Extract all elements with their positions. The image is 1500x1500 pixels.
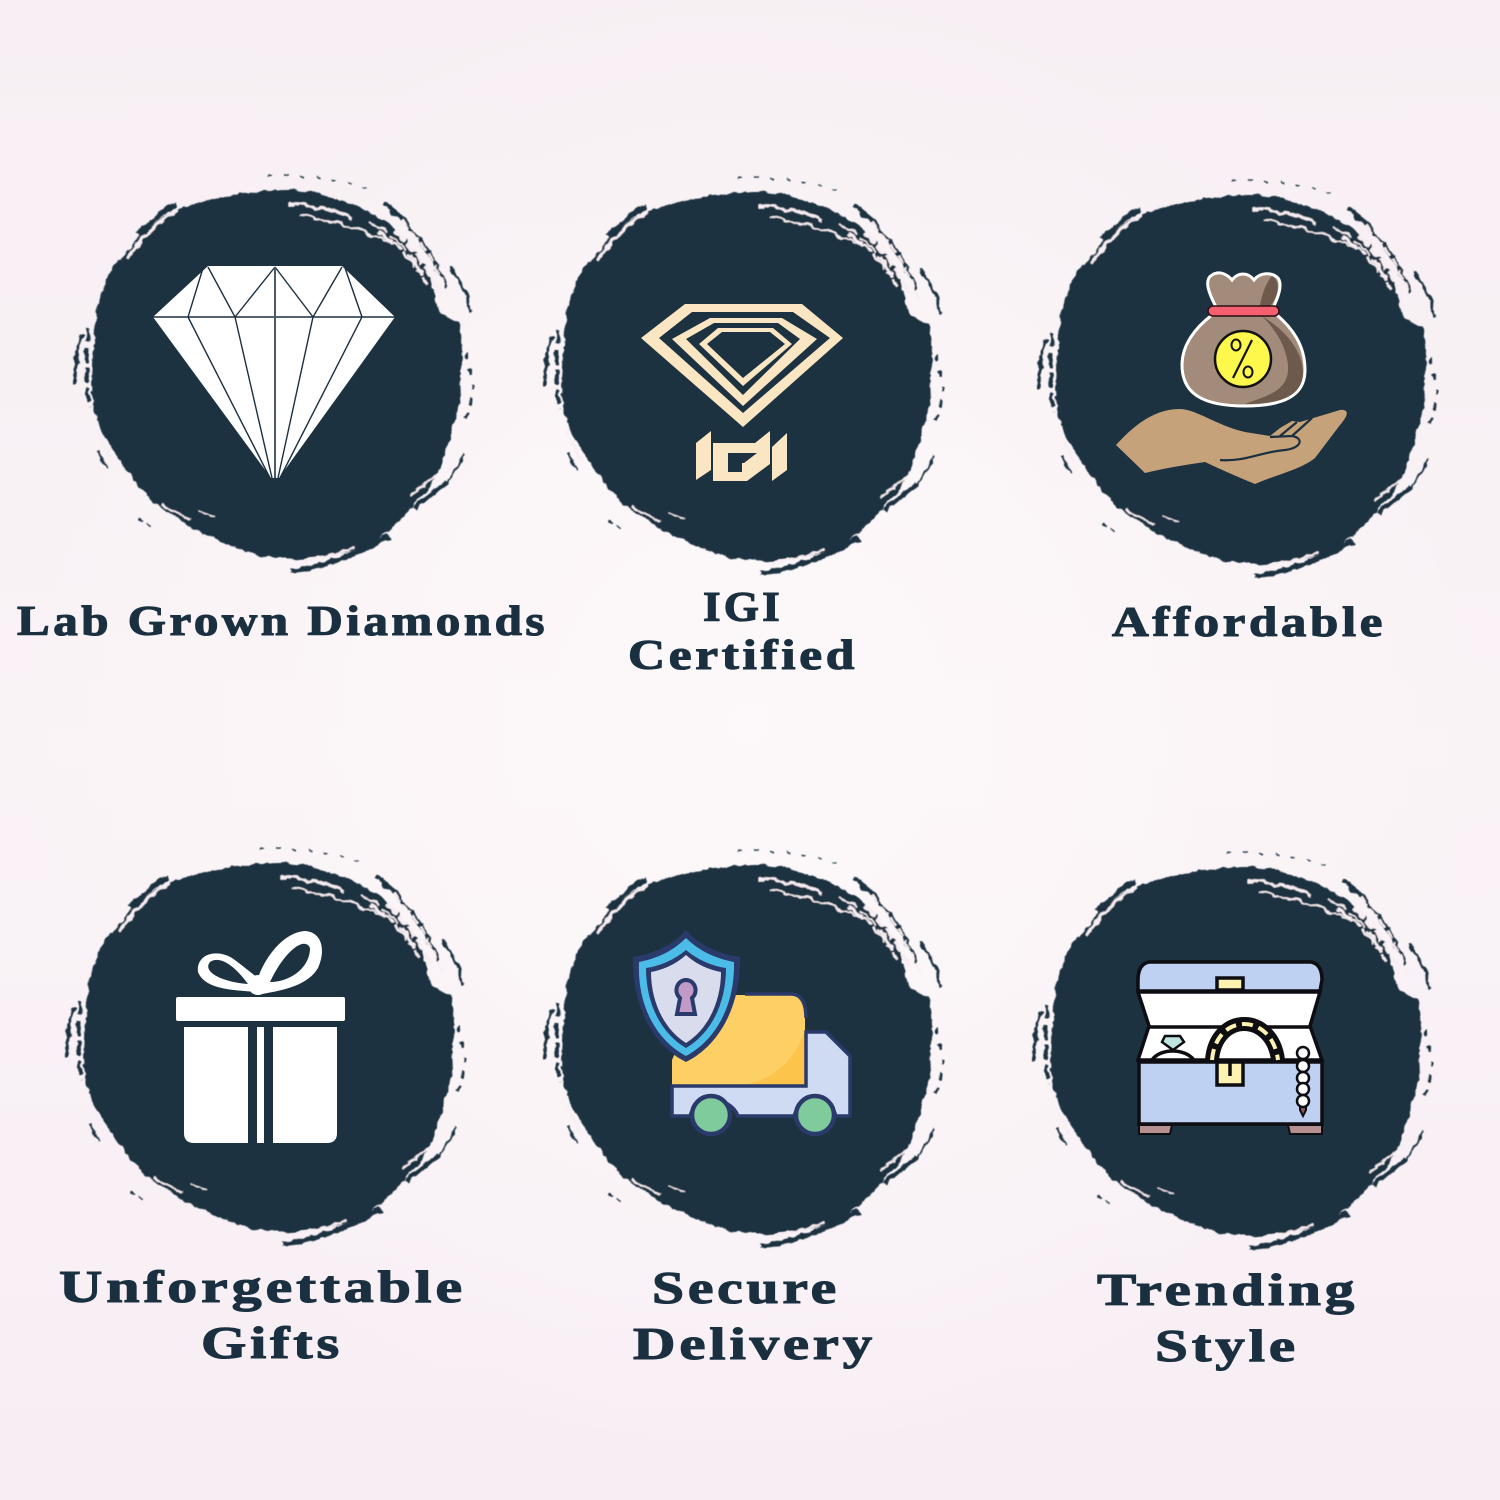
- label: [628, 585, 858, 679]
- icon: jewellery box: [1138, 962, 1322, 1134]
- panel: unforgettable gifts: [59, 848, 466, 1368]
- brush circle 4: [67, 848, 464, 1244]
- panel: secure delivery: [545, 850, 942, 1369]
- icon: delivery truck with shield: [633, 930, 850, 1134]
- label: Certified: [628, 633, 858, 679]
- icon: gift box: [176, 931, 345, 1143]
- label: Style: [1155, 1320, 1299, 1371]
- label: [59, 1261, 466, 1368]
- label: Trending: [1097, 1264, 1358, 1315]
- brush circle 1: [75, 176, 472, 571]
- icon: IGI logo: [641, 304, 843, 481]
- icon: diamond: [153, 266, 395, 478]
- brush circle 5: [545, 850, 942, 1246]
- icon: hand: [1116, 409, 1347, 484]
- panel: IGI certified: [545, 178, 942, 679]
- icon: money bag: [1182, 273, 1305, 406]
- label: [1097, 1264, 1358, 1371]
- brush circle 2: [545, 178, 942, 573]
- label: Affordable: [1112, 600, 1386, 646]
- label: Gifts: [201, 1317, 343, 1368]
- panel: affordable: [1039, 180, 1436, 646]
- panel: lab grown diamonds: [17, 176, 548, 645]
- label: Unforgettable: [59, 1261, 466, 1312]
- brush circle 6: [1034, 852, 1431, 1248]
- label: Secure: [652, 1262, 840, 1313]
- label: IGI: [703, 585, 783, 631]
- label: Delivery: [633, 1318, 876, 1369]
- label: [633, 1262, 876, 1369]
- label: Lab Grown Diamonds: [17, 599, 548, 645]
- panel: trending style: [1034, 852, 1431, 1371]
- brush circle 3: [1039, 180, 1436, 576]
